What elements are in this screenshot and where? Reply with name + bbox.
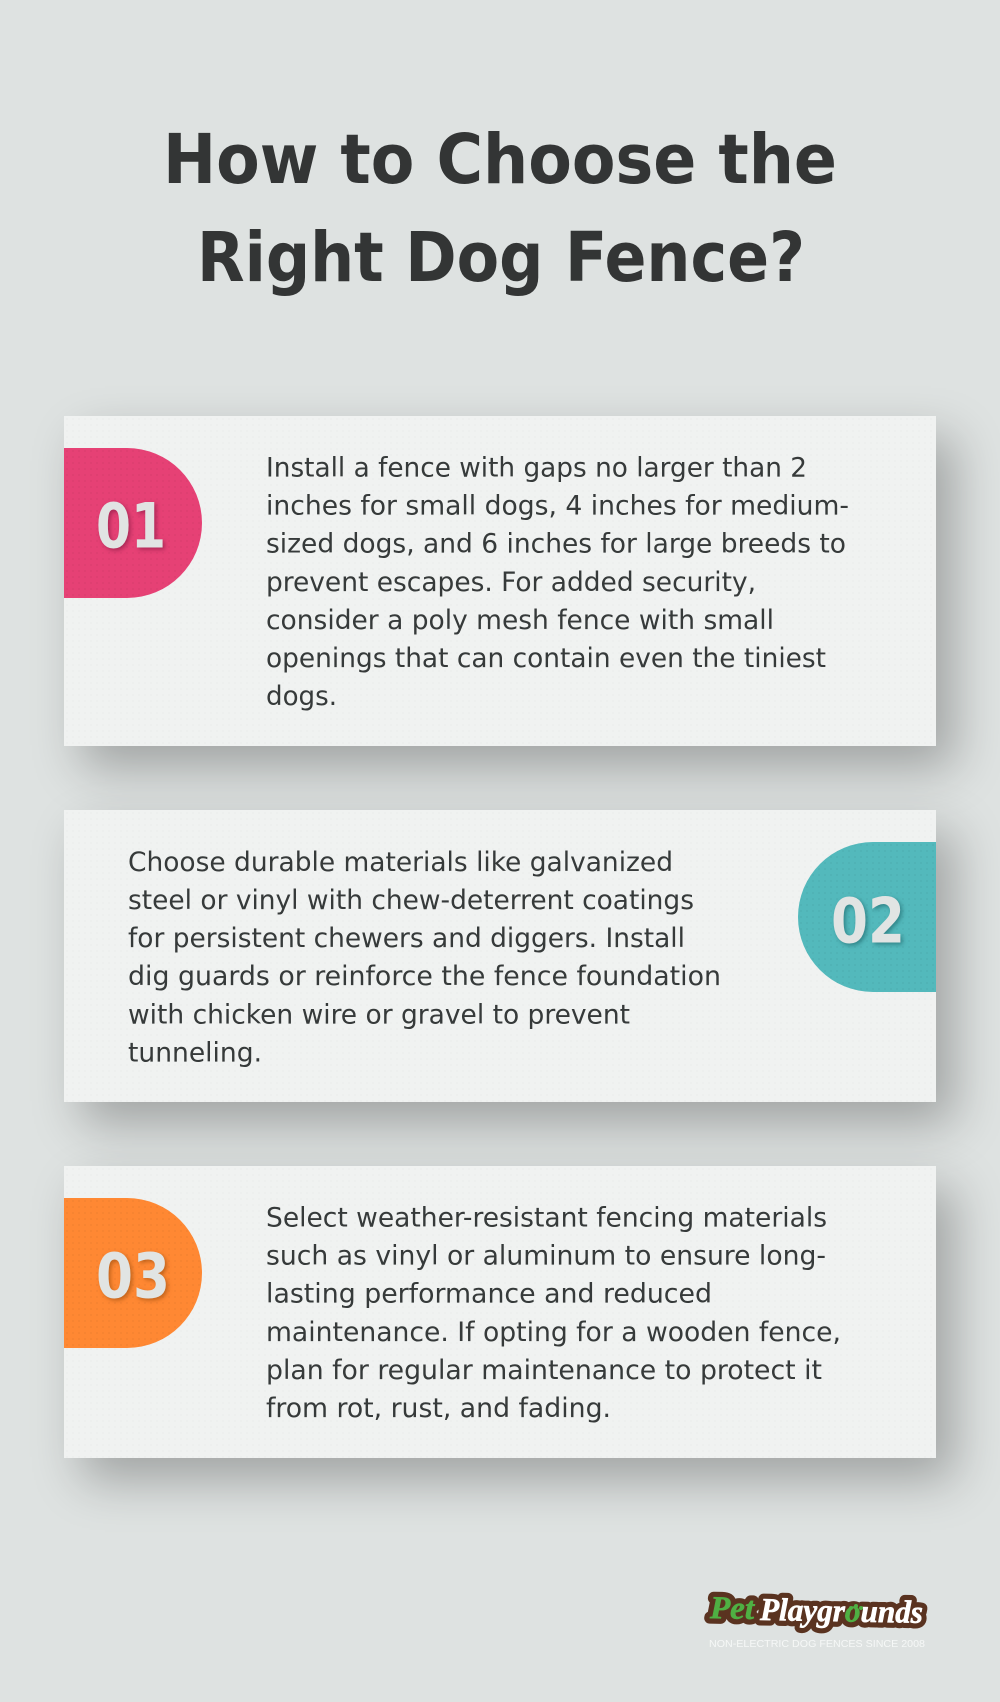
title: Right Dog Fence? (197, 218, 805, 298)
icon: paw toes (849, 1604, 863, 1610)
text block: card 02: for persistent chewers and diggers. Install (128, 923, 685, 954)
text block: card 02: steel or vinyl with chew-deterrent coatings (128, 885, 694, 916)
text block: card 01: consider a poly mesh fence with small (266, 605, 774, 636)
logo: Pet Playgrounds: Playgrounds (759, 1591, 923, 1630)
badge: 02: 02 (831, 884, 905, 958)
title (163, 120, 837, 298)
logo: Pet Playgrounds: Playgrounds (759, 1591, 923, 1630)
text block: card 03 (266, 1202, 841, 1424)
text block: card 01 (266, 452, 849, 712)
text block: card 03: Select weather-resistant fencing materials (266, 1202, 827, 1234)
logo: Pet Playgrounds (704, 1589, 928, 1650)
text block: card 03: from rot, rust, and fading. (266, 1393, 611, 1424)
tagline: NON-ELECTRIC DOG FENCES SINCE 2008 (709, 1638, 925, 1650)
text block: card 01: prevent escapes. For added security, (266, 567, 756, 598)
text block: card 02: tunneling. (128, 1037, 262, 1068)
badge: 01: 01 (96, 490, 166, 562)
badge: 02 (798, 842, 936, 992)
text block: card 03: maintenance. If opting for a wooden fence, (266, 1317, 841, 1348)
text block: card 02: Choose durable materials like galvanized (128, 847, 673, 878)
panel: card 01 (64, 416, 936, 746)
text block: card 01: inches for small dogs, 4 inches for medium- (266, 491, 849, 522)
title: How to Choose the (163, 120, 837, 200)
text block: card 01: openings that can contain even the tiniest (266, 643, 826, 674)
logo: Pet Playgrounds: Pet (709, 1589, 756, 1626)
text block: card 02 (128, 847, 721, 1068)
badge: 03: 03 (96, 1240, 170, 1312)
panel: card 03 (64, 1166, 936, 1458)
text block: card 03: plan for regular maintenance to protect it (266, 1355, 822, 1386)
text block: card 01: dogs. (266, 681, 337, 712)
text block: card 02: with chicken wire or gravel to prevent (128, 999, 630, 1030)
badge: 03 (64, 1198, 202, 1348)
text block: card 02: dig guards or reinforce the fence foundation (128, 961, 721, 992)
text block: card 01: Install a fence with gaps no larger than 2 (266, 452, 807, 484)
text block: card 03: lasting performance and reduced (266, 1279, 712, 1310)
panel: card 02 (64, 810, 936, 1102)
text block: card 01: sized dogs, and 6 inches for large breeds to (266, 529, 846, 560)
text block: card 03: such as vinyl or aluminum to ensure long- (266, 1241, 826, 1272)
logo: Pet Playgrounds: Pet (709, 1589, 756, 1626)
badge: 01 (64, 448, 202, 598)
